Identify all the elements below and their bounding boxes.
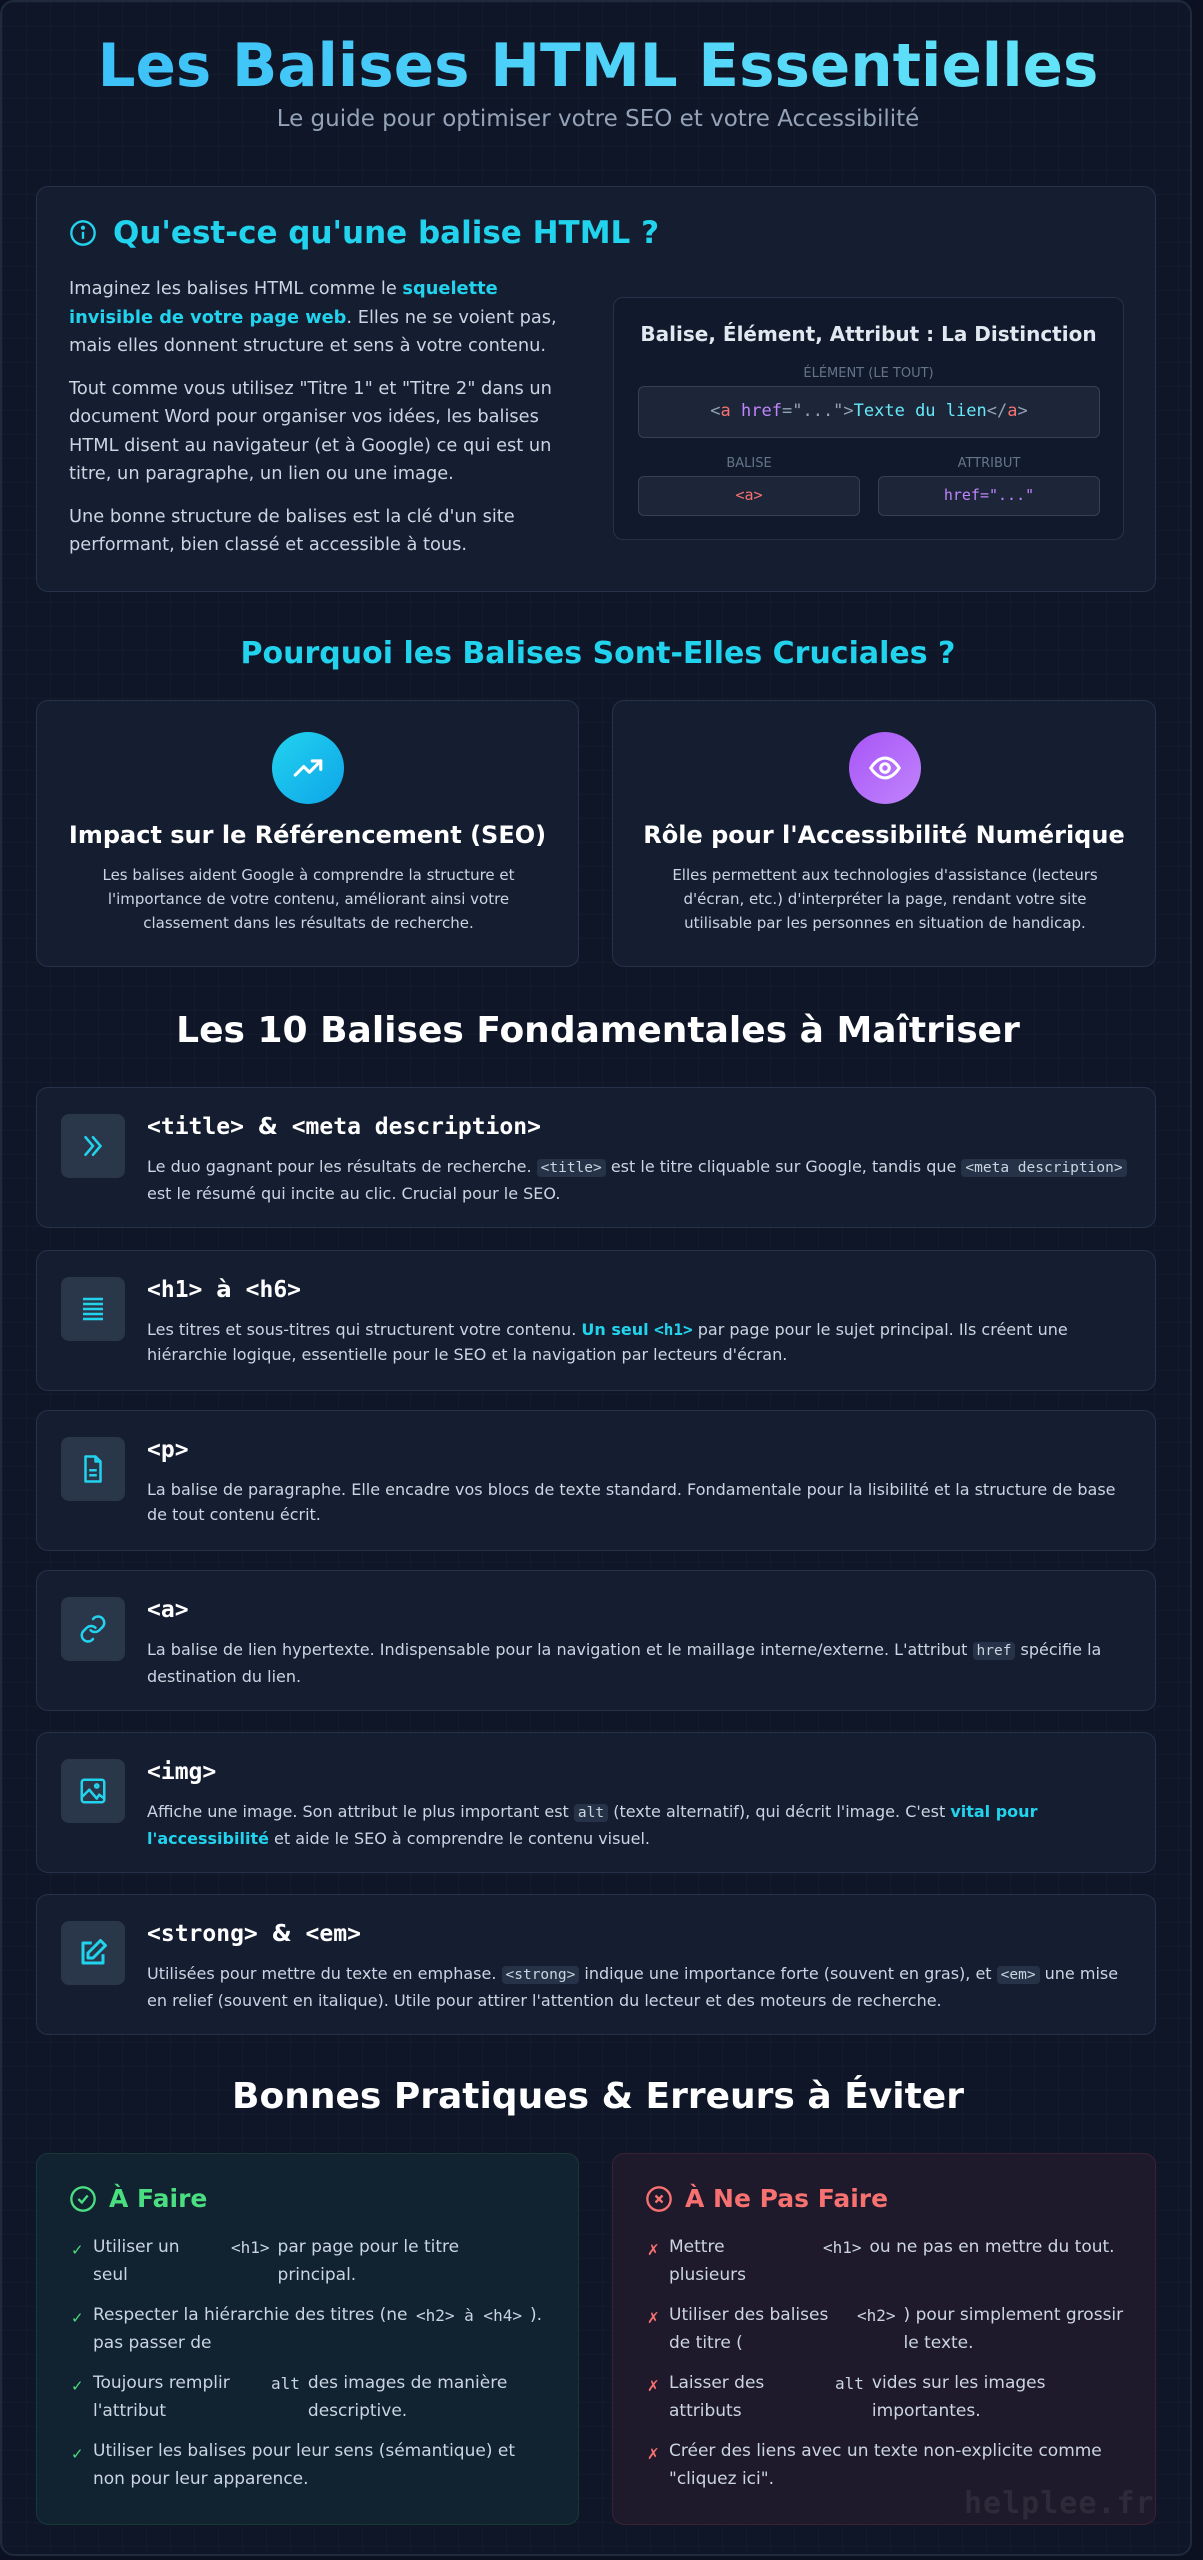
card: strong & em (36, 1894, 1156, 2035)
intro text: Imaginez les balises HTML comme le squelette invisible de votre page web. Elles ne se voient pas, mais elles donnent structure et sens à votre contenu. (69, 278, 557, 356)
heading: bonnes pratiques: Bonnes Pratiques & Erreurs à Éviter (232, 2076, 964, 2117)
icon: eye (849, 732, 921, 804)
icon: trending up (272, 732, 344, 804)
card: a: La balise de lien hypertexte. Indispensable pour la navigation et le maillage interne/externe. L'attribut href spécifie la destination du lien. (147, 1640, 1101, 1686)
heading: pourquoi: Pourquoi les Balises Sont-Elles Cruciales ? (241, 636, 955, 671)
text: Les balises aident Google à comprendre la structure et l'importance de votre contenu, améliorant ainsi votre classement dans les résultats de recherche. (102, 866, 515, 932)
heading with info icon: Qu'est-ce qu'une balise HTML ? (113, 215, 659, 251)
card: p: La balise de paragraphe. Elle encadre vos blocs de texte standard. Fondamentale pour la lisibilité et la structure de base de tout contenu écrit. (147, 1480, 1116, 1524)
intro text: Tout comme vous utilisez "Titre 1" et "Titre 2" dans un document Word pour organiser vos idées, les balises HTML disent au navigateur (et à Google) ce qui est un titre, un paragraphe, un lien ou une image. (69, 378, 552, 484)
list: Mettre plusieurs (669, 2237, 746, 2284)
card: title & meta (36, 1087, 1156, 1228)
list: ✓ (71, 2445, 84, 2463)
list: ✓ (71, 2241, 84, 2259)
list: ✓ (71, 2309, 84, 2327)
list: Utiliser un seul (93, 2237, 180, 2284)
icon: edit (61, 1921, 125, 1985)
card: p: <p> (147, 1437, 189, 1463)
distinction box: ATTRIBUT (958, 456, 1020, 471)
list: ✗ (647, 2241, 660, 2259)
distinction box: <a> (735, 486, 763, 504)
list: Créer des liens avec un texte non-explicite comme "cliquez ici". (669, 2441, 1102, 2488)
list: ). (530, 2305, 542, 2325)
panel: à ne pas faire (612, 2153, 1156, 2525)
list: des images de manière descriptive. (308, 2373, 507, 2420)
watermark: helplee.fr (964, 2486, 1155, 2521)
card: h1-h6: <h1> à <h6> (147, 1277, 301, 1303)
icon: link (61, 1597, 125, 1661)
title: Les Balises HTML Essentielles (98, 32, 1098, 101)
distinction box: Balise, Élément, Attribut : La Distinction (640, 322, 1097, 346)
list: ou ne pas en mettre du tout. (870, 2237, 1115, 2257)
distinction box: href="..." (944, 486, 1034, 504)
distinction box (613, 297, 1124, 540)
intro text (68, 278, 557, 555)
list: ✓ (71, 2377, 84, 2395)
panel: à faire (36, 2153, 579, 2525)
title: Impact sur le Référencement (SEO) (69, 821, 546, 849)
heading: À Ne Pas Faire (685, 2184, 888, 2213)
card: strong & em: <strong> & <em> (147, 1921, 361, 1947)
card: a (36, 1570, 1156, 1711)
heading: À Faire (109, 2184, 207, 2213)
list: Laisser des attributs (669, 2373, 764, 2420)
card: img: Affiche une image. Son attribut le plus important est alt (texte alternatif), qui décrit l'image. C'est vital pour l'accessibilité et aide le SEO à comprendre le contenu visuel. (147, 1802, 1037, 1848)
list: <h1> (231, 2238, 270, 2257)
icon: lines (61, 1277, 125, 1341)
icon: file (61, 1437, 125, 1501)
list: Toujours remplir l'attribut (93, 2373, 230, 2420)
list: ✗ (647, 2445, 660, 2463)
icon: chevrons (61, 1114, 125, 1178)
list: vides sur les images importantes. (872, 2373, 1045, 2420)
list: ✗ (647, 2309, 660, 2327)
icon: image (61, 1759, 125, 1823)
list: Utiliser des balises de titre ( (669, 2305, 828, 2352)
list: <h2> (857, 2306, 896, 2325)
list (647, 2237, 1124, 2488)
distinction box: BALISE (726, 456, 772, 471)
list: alt (835, 2374, 864, 2393)
intro text: Une bonne structure de balises est la clé d'un site performant, bien classé et accessible à tous. (69, 506, 515, 555)
list (71, 2237, 542, 2488)
list: ) pour simplement grossir le texte. (904, 2305, 1123, 2352)
card: title & meta: Le duo gagnant pour les résultats de recherche. <title> est le titre cliquable sur Google, tandis que <meta description> est le résumé qui incite au clic. Crucial pour le SEO. (147, 1157, 1123, 1203)
list: ✗ (647, 2377, 660, 2395)
text: Elles permettent aux technologies d'assistance (lecteurs d'écran, etc.) d'interpréter la page, rendant votre site utilisable par les personnes en situation de handicap. (672, 866, 1098, 932)
title: Rôle pour l'Accessibilité Numérique (643, 821, 1125, 849)
list: <h2> à <h4> (416, 2306, 522, 2325)
subtitle: Le guide pour optimiser votre SEO et votre Accessibilité (277, 106, 919, 132)
distinction box: ÉLÉMENT (LE TOUT) (803, 366, 934, 381)
panel: accessibilité (612, 700, 1156, 967)
card: a: <a> (147, 1597, 189, 1623)
heading: 10 balises: Les 10 Balises Fondamentales à Maîtriser (176, 1010, 1020, 1051)
panel: SEO (36, 700, 579, 967)
card: p (36, 1410, 1156, 1551)
list: Utiliser les balises pour leur sens (sémantique) et non pour leur apparence. (93, 2441, 515, 2488)
card: h1-h6: Les titres et sous-titres qui structurent votre contenu. Un seul <h1> par page pour le sujet principal. Ils créent une hiérarchie logique, essentielle pour le SEO et la navigation par lecteurs d'écran. (147, 1320, 1068, 1364)
panel: qu'est-ce qu'une balise (36, 186, 1156, 592)
card: strong & em: Utilisées pour mettre du texte en emphase. <strong> indique une importance forte (souvent en gras), et <em> une mise en relief (souvent en italique). Utile pour attirer l'attention du lecteur et des moteurs de recherche. (147, 1964, 1118, 2010)
card: img: <img> (147, 1759, 216, 1785)
card: h1-h6 (36, 1250, 1156, 1391)
list: <h1> (823, 2238, 862, 2257)
list: par page pour le titre principal. (278, 2237, 459, 2284)
list: Respecter la hiérarchie des titres (ne pas passer de (93, 2305, 407, 2352)
card: title & meta: <title> & <meta description> (147, 1114, 541, 1140)
card: img (36, 1732, 1156, 1873)
distinction box: <a href="...">Texte du lien</a> (710, 401, 1028, 421)
list: alt (271, 2374, 300, 2393)
